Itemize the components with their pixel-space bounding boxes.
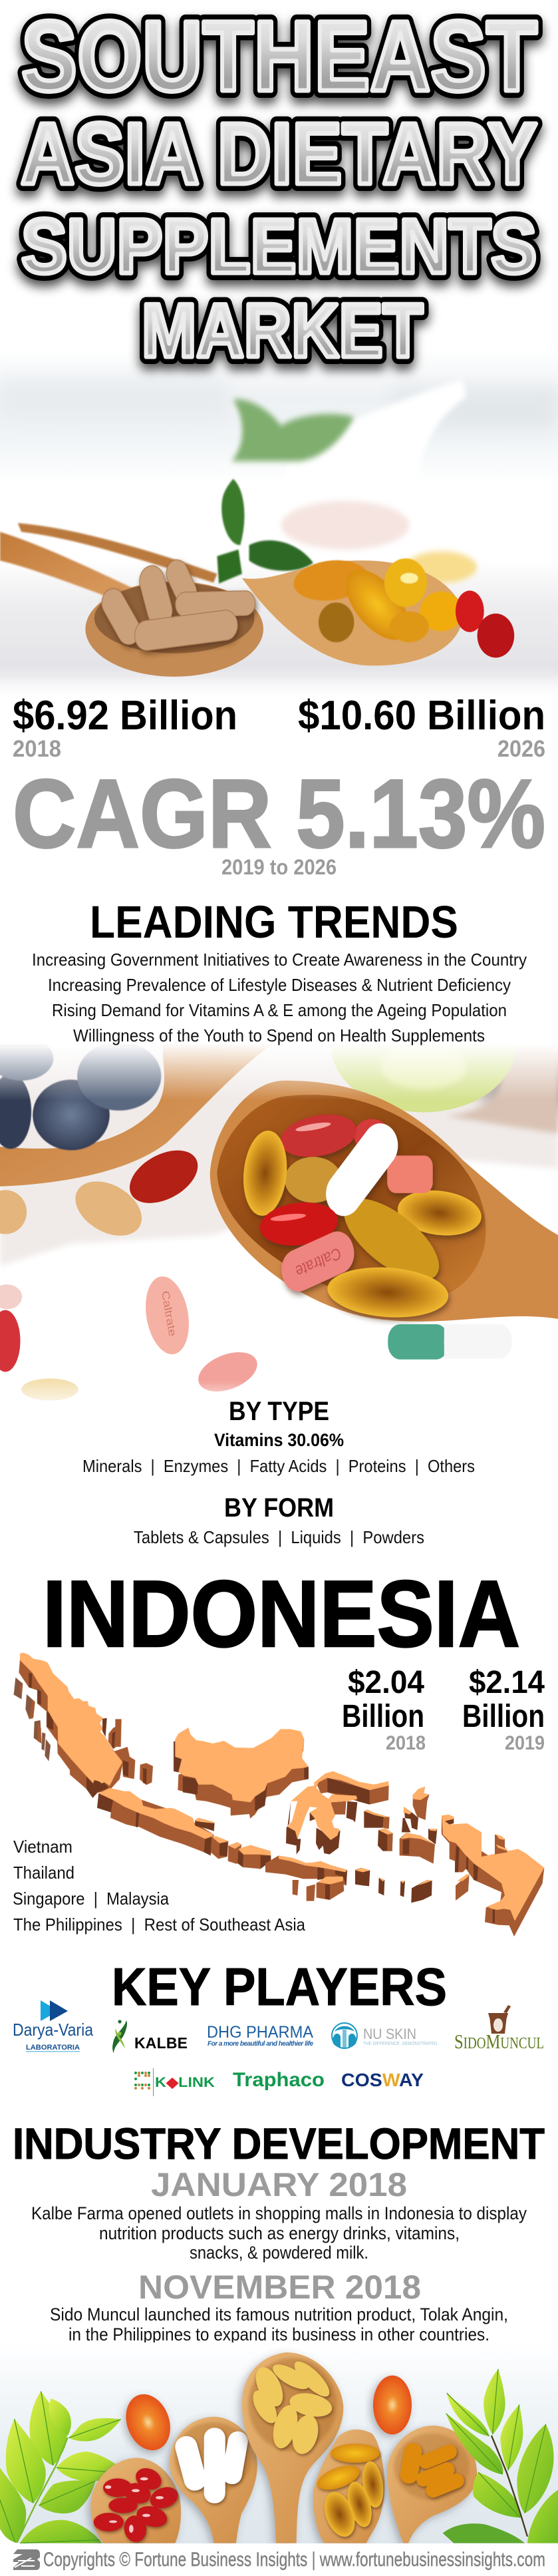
- stat: Indonesia 2019: Billion: [462, 1699, 545, 1734]
- stat: Indonesia 2019: $2.14: [469, 1665, 545, 1700]
- photo: supplements on wooden spoons with leaves: [0, 2342, 558, 2544]
- list: leading trends: Rising Demand for Vitamins A & E among the Ageing Population: [52, 1000, 507, 1020]
- list: leading trends: Willingness of the Youth to Spend on Health Supplements: [73, 1025, 485, 1045]
- logo: Cosway: COSWAY: [341, 2070, 424, 2090]
- logo: Nu Skin: [332, 2023, 438, 2048]
- segment: by type: [82, 1397, 475, 1476]
- segment: by form: [134, 1493, 424, 1547]
- heading: leading trends: LEADING TRENDS: [90, 896, 458, 948]
- list: countries: Thailand: [13, 1863, 74, 1883]
- stat: Indonesia 2019: 2019: [505, 1732, 545, 1754]
- development: January 2018: snacks, & powdered milk.: [190, 2243, 368, 2263]
- logo: DHG Pharma: DHG PHARMA: [207, 2023, 313, 2042]
- pill imprint: Caltrate: [293, 1244, 343, 1282]
- photo: capsules and softgels on wooden spoons: [0, 349, 558, 702]
- list: countries: The Philippines | Rest of Southeast Asia: [13, 1915, 305, 1934]
- logo: Nu Skin: NU SKIN: [363, 2026, 416, 2042]
- logo: Kalbe: KALBE: [134, 2034, 188, 2052]
- logo: Sido Muncul: SIDOMUNCUL: [454, 2030, 544, 2053]
- list: countries: Singapore | Malaysia: [13, 1889, 169, 1909]
- market value 2026: $10.60 Billion: [298, 693, 545, 739]
- market value 2026: 2026: [497, 736, 545, 762]
- development: January 2018: [31, 2166, 527, 2263]
- stat: Indonesia 2018: Billion: [342, 1699, 424, 1734]
- logo: Darya-Varia: LABORATORIA: [26, 2044, 80, 2052]
- development: November 2018: Sido Muncul launched its famous nutrition product, Tolak Angin,: [50, 2304, 508, 2324]
- photo: pills on wooden spoon with blueberries: [0, 978, 558, 1411]
- heading: Indonesia: INDONESIA: [43, 1561, 520, 1667]
- stat: Indonesia 2019: [462, 1665, 545, 1754]
- logo: K-Link: K◆LINK: [155, 2075, 215, 2090]
- development: January 2018: nutrition products such as energy drinks, vitamins,: [99, 2223, 460, 2243]
- photo: pills on wooden spoon with blueberries: Caltrate: [160, 1290, 179, 1338]
- market value 2026: [298, 693, 545, 762]
- logo: Kalbe: [112, 2020, 188, 2053]
- logo: Darya-Varia: Darya-Varia: [13, 2020, 93, 2040]
- list: leading trends: Increasing Government Initiatives to Create Awareness in the Country: [32, 950, 527, 970]
- heading: key players: KEY PLAYERS: [112, 1957, 447, 2016]
- title: MARKET: [142, 289, 423, 373]
- development: November 2018: NOVEMBER 2018: [138, 2269, 421, 2306]
- stat: Indonesia 2018: 2018: [386, 1732, 426, 1754]
- logo: Darya-Varia: [13, 2000, 93, 2052]
- CAGR: 2019 to 2026: [221, 855, 337, 879]
- list: leading trends: Increasing Prevalence of Lifestyle Diseases & Nutrient Deficiency: [48, 975, 511, 995]
- logo: DHG Pharma: For a more beautiful and healthier life: [208, 2040, 313, 2048]
- development: November 2018: [50, 2269, 508, 2344]
- map of Indonesia: [14, 1652, 544, 1936]
- segment: by form: Tablets & Capsules | Liquids | Powders: [134, 1527, 424, 1547]
- logo: Nu Skin: THE DIFFERENCE. DEMONSTRATED.: [363, 2040, 438, 2046]
- list: leading trends: [32, 950, 527, 1045]
- market value 2018: [13, 693, 237, 762]
- title: [21, 0, 537, 373]
- logo: Sido Muncul: [454, 2005, 544, 2053]
- title: MARKET: [142, 289, 423, 373]
- market value 2018: 2018: [13, 736, 61, 762]
- market value 2018: $6.92 Billion: [13, 693, 237, 739]
- segment: by type: BY TYPE: [229, 1397, 329, 1426]
- segment: by form: BY FORM: [224, 1493, 334, 1523]
- list: countries: [13, 1837, 305, 1934]
- segment: by type: Minerals | Enzymes | Fatty Acids | Proteins | Others: [82, 1456, 475, 1476]
- segment: by type: Vitamins 30.06%: [214, 1430, 344, 1450]
- stat: Indonesia 2018: $2.04: [348, 1665, 424, 1700]
- logo: Traphaco: Traphaco: [233, 2069, 325, 2091]
- list: countries: Vietnam: [13, 1837, 72, 1857]
- logo: K-Link: [134, 2068, 215, 2096]
- development: November 2018: in the Philippines to expand its business in other countries.: [69, 2324, 489, 2344]
- development: January 2018: JANUARY 2018: [151, 2166, 407, 2203]
- stat: Indonesia 2018: [342, 1665, 426, 1754]
